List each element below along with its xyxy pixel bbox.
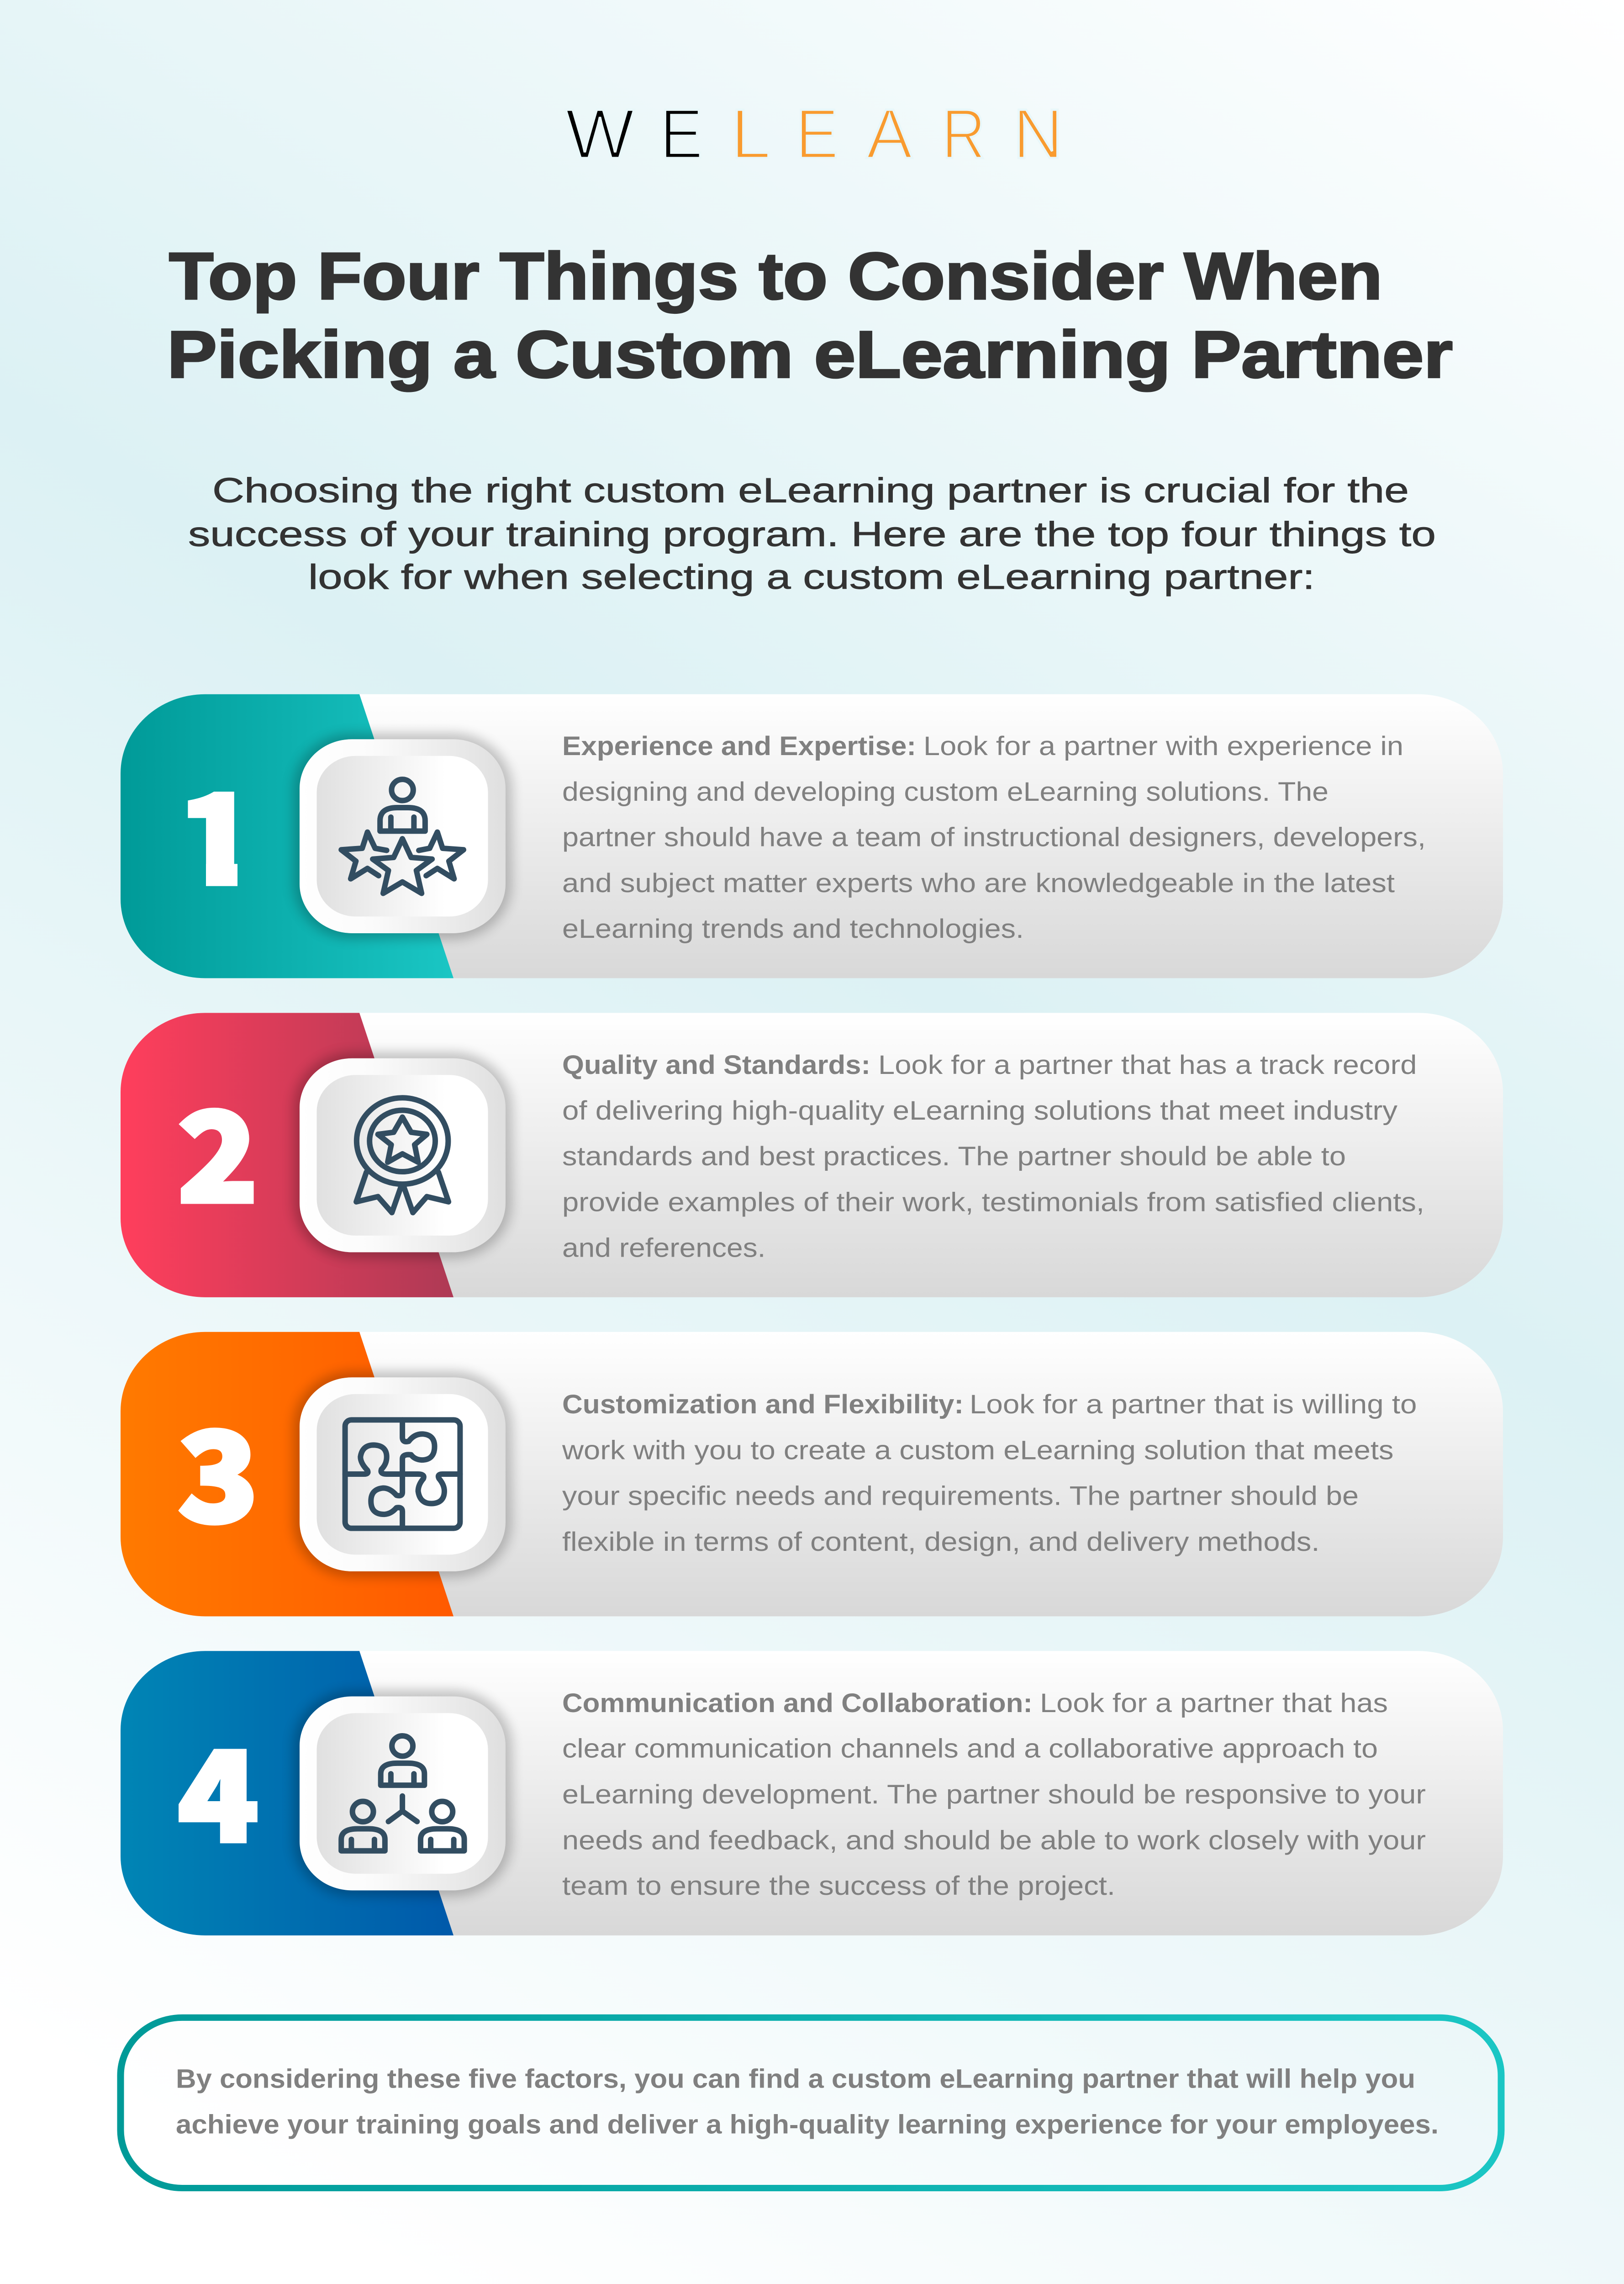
title: Top Four Things to Consider When xyxy=(169,239,1382,313)
logo: WeLearn: W xyxy=(565,95,634,173)
coloured number tab 3 xyxy=(121,1332,453,1616)
card 3 text: Look for a partner that is willing to xyxy=(970,1390,1417,1419)
card 2 text: standards and best practices. The partner should be able to xyxy=(562,1142,1346,1171)
panel: card 3 customization and flexibility xyxy=(121,1332,1503,1616)
number 4: 4 xyxy=(178,1697,258,1877)
logo: WeLearn xyxy=(565,95,1063,173)
card 4 text: team to ensure the success of the project. xyxy=(562,1871,1115,1901)
callout outline xyxy=(121,2018,1501,2188)
card background 1 xyxy=(121,694,1503,978)
icon tile shadow 2 xyxy=(293,1052,512,1258)
card 1 text: Experience and Expertise: xyxy=(562,731,916,761)
logo: WeLearn: N xyxy=(1013,95,1063,173)
card 3 text xyxy=(562,1390,1417,1556)
number 1: 1 xyxy=(177,740,258,920)
card 1 text: Look for a partner with experience in xyxy=(923,731,1403,761)
card 2 text: Quality and Standards: xyxy=(562,1050,870,1080)
card 3 text: flexible in terms of content, design, and delivery methods. xyxy=(562,1527,1320,1556)
intro paragraph: Choosing the right custom eLearning partner is crucial for the xyxy=(212,471,1409,510)
card 4 text: eLearning development. The partner should be responsive to your xyxy=(562,1780,1426,1809)
card 2 text xyxy=(562,1050,1424,1263)
card 2 text: of delivering high-quality eLearning solutions that meet industry xyxy=(562,1096,1397,1125)
icon tile shadow 4 xyxy=(293,1691,512,1897)
card 1 text: eLearning trends and technologies. xyxy=(562,914,1024,943)
intro paragraph xyxy=(188,471,1436,597)
panel: card 1 experience and expertise xyxy=(121,694,1503,978)
title xyxy=(167,239,1453,391)
coloured number tab 2 xyxy=(121,1013,453,1297)
panel: closing callout xyxy=(121,2018,1501,2188)
icon: person with three stars xyxy=(341,779,464,894)
card 3 text: your specific needs and requirements. The partner should be xyxy=(562,1481,1359,1511)
coloured number tab 4 xyxy=(121,1651,453,1935)
card 2 text: Look for a partner that has a track record xyxy=(878,1050,1417,1080)
card 4 text: Communication and Collaboration: xyxy=(562,1688,1033,1718)
icon tile shadow 3 xyxy=(293,1371,512,1577)
card 1 text: and subject matter experts who are knowledgeable in the latest xyxy=(562,868,1395,898)
panel: card 2 quality and standards xyxy=(121,1013,1503,1297)
card 1 text xyxy=(562,731,1426,943)
card 1 text: partner should have a team of instructional designers, developers, xyxy=(562,822,1426,852)
logo: WeLearn: E xyxy=(796,95,838,173)
card 2 text: provide examples of their work, testimonials from satisfied clients, xyxy=(562,1187,1424,1217)
card 1 text: designing and developing custom eLearning solutions. The xyxy=(562,777,1329,806)
card background 2 xyxy=(121,1013,1503,1297)
icon tile shadow 1 xyxy=(293,733,512,939)
callout text: achieve your training goals and deliver a high-quality learning experience for your employees. xyxy=(176,2110,1439,2139)
logo: WeLearn: A xyxy=(866,95,912,173)
card 2 text: and references. xyxy=(562,1233,765,1263)
title: Picking a Custom eLearning Partner xyxy=(167,317,1453,391)
logo: WeLearn: E xyxy=(660,95,703,173)
icon: three connected people xyxy=(341,1736,464,1851)
icon tile 4 xyxy=(300,1697,506,1890)
coloured number tab 1 xyxy=(121,694,453,978)
callout text: By considering these five factors, you can find a custom eLearning partner that will help you xyxy=(176,2064,1415,2094)
icon: four-piece puzzle xyxy=(345,1420,460,1528)
intro paragraph: look for when selecting a custom eLearning partner: xyxy=(308,557,1315,597)
card 4 text xyxy=(562,1688,1426,1901)
icon tile 3 xyxy=(300,1377,506,1571)
card 4 text: Look for a partner that has xyxy=(1040,1688,1388,1718)
logo: WeLearn: R xyxy=(942,95,986,173)
panel: card 4 communication and collaboration xyxy=(121,1651,1503,1935)
card 4 text: needs and feedback, and should be able to work closely with your xyxy=(562,1825,1426,1855)
icon: award rosette with star xyxy=(356,1098,448,1213)
card 4 text: clear communication channels and a collaborative approach to xyxy=(562,1734,1378,1763)
card 3 text: Customization and Flexibility: xyxy=(562,1390,964,1419)
intro paragraph: success of your training program. Here are the top four things to xyxy=(188,515,1436,554)
card background 4 xyxy=(121,1651,1503,1935)
icon tile 2 xyxy=(300,1058,506,1252)
icon tile 1 xyxy=(300,739,506,933)
number 3: 3 xyxy=(178,1378,258,1557)
logo: WeLearn: L xyxy=(731,95,771,173)
number 2: 2 xyxy=(178,1057,258,1237)
card background 3 xyxy=(121,1332,1503,1616)
callout text xyxy=(176,2064,1439,2139)
card 3 text: work with you to create a custom eLearning solution that meets xyxy=(562,1435,1394,1465)
